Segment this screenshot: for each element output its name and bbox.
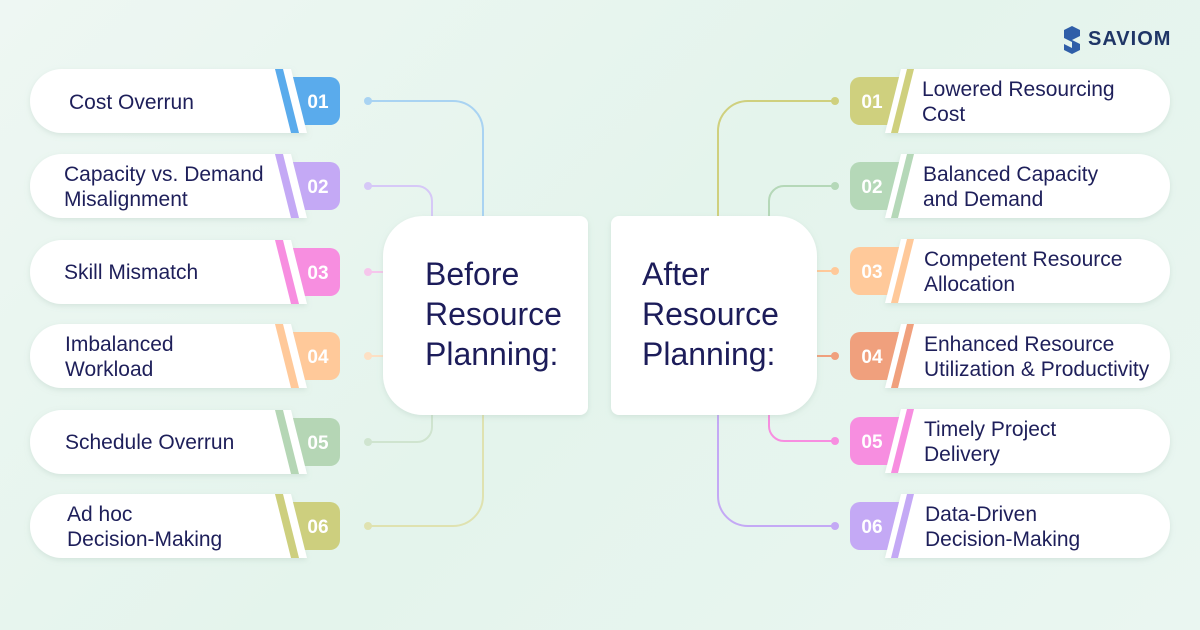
right item 06 — [850, 494, 1170, 558]
left item 01: Cost Overrun — [69, 91, 194, 114]
left item 02: Capacity vs. Demand — [64, 163, 264, 186]
right item 01: Lowered Resourcing — [922, 78, 1115, 101]
left item 05: 05 — [307, 433, 329, 454]
right item 05: Timely Project — [924, 418, 1056, 441]
right item 04 — [850, 324, 1170, 388]
panel: before — [383, 216, 588, 415]
left item 04: Imbalanced — [65, 333, 174, 356]
left item 06 — [30, 494, 340, 558]
left item 06: 06 — [307, 517, 329, 538]
left item 05 — [30, 410, 340, 474]
right item 06: Decision-Making — [925, 528, 1080, 551]
right item 02: Balanced Capacity — [923, 163, 1099, 186]
right item 04: Enhanced Resource — [924, 333, 1114, 356]
panel: before: Before — [425, 256, 519, 292]
right item 02 — [850, 154, 1170, 218]
logo: SAVIOM — [1088, 28, 1171, 50]
left item 04: Workload — [65, 358, 153, 381]
right item 03 — [850, 239, 1170, 303]
right item 06: 06 — [861, 517, 883, 538]
left item 04 — [30, 324, 340, 388]
right item 05: 05 — [861, 432, 883, 453]
panel: before: Resource — [425, 296, 562, 332]
left item 01 — [30, 69, 340, 133]
connectors left — [364, 97, 483, 530]
panel: after — [611, 216, 817, 415]
left item 02: 02 — [307, 177, 329, 198]
panel: before: Planning: — [425, 336, 558, 372]
connectors right — [718, 97, 839, 530]
right item 04: Utilization & Productivity — [924, 358, 1150, 381]
left item 03 — [30, 240, 340, 304]
logo — [1064, 26, 1171, 54]
right item 03: Competent Resource — [924, 248, 1122, 271]
left item 03: 03 — [307, 263, 329, 284]
right item 01: 01 — [861, 92, 883, 113]
right item 01: Cost — [922, 103, 965, 126]
panel: after: Planning: — [642, 336, 775, 372]
left item 06: Decision-Making — [67, 528, 222, 551]
left item 05: Schedule Overrun — [65, 431, 234, 454]
left item 04: 04 — [307, 347, 329, 368]
right item 02: and Demand — [923, 188, 1043, 211]
left item 02: Misalignment — [64, 188, 188, 211]
left item 03: Skill Mismatch — [64, 261, 198, 284]
right item 06: Data-Driven — [925, 503, 1037, 526]
right item 05: Delivery — [924, 443, 1000, 466]
right item 03: 03 — [861, 262, 883, 283]
right item 03: Allocation — [924, 273, 1015, 296]
panel: after: After — [642, 256, 710, 292]
panel: after: Resource — [642, 296, 779, 332]
right item 05 — [850, 409, 1170, 473]
left item 01: 01 — [307, 92, 329, 113]
left item 02 — [30, 154, 340, 218]
left item 06: Ad hoc — [67, 503, 132, 526]
right item 04: 04 — [861, 347, 883, 368]
right item 01 — [850, 69, 1170, 133]
right item 02: 02 — [861, 177, 883, 198]
